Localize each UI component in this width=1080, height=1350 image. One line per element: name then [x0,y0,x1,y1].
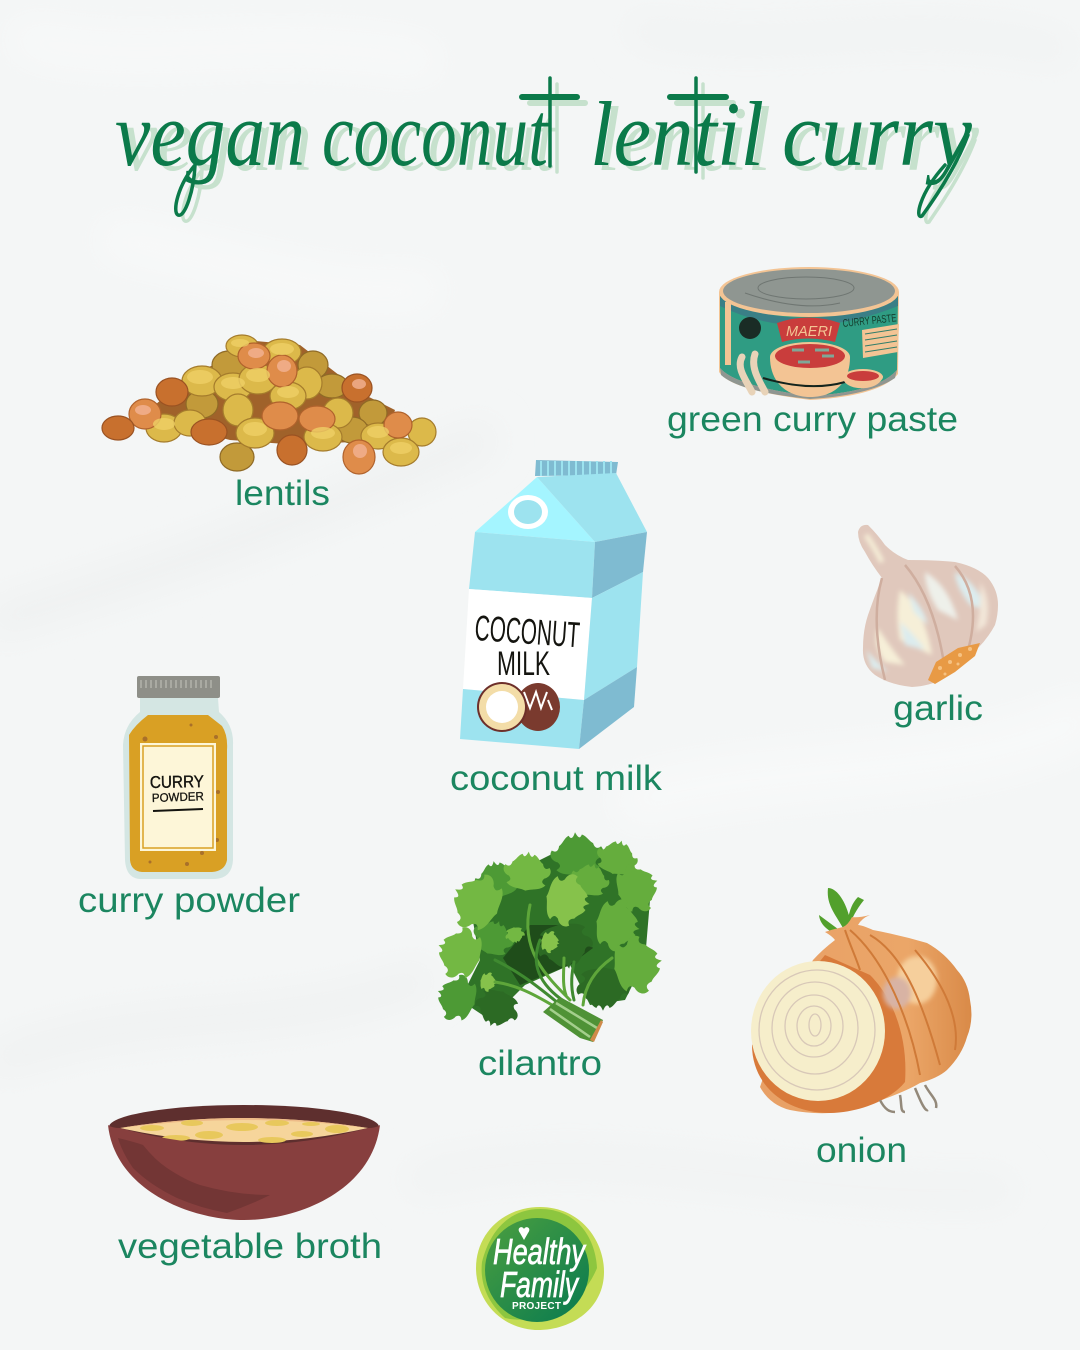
icon: vegetable broth bowl [108,1105,380,1220]
icon: onion [751,888,971,1113]
logo: Healthy Family Project: Healthy [493,1231,587,1272]
icon: lentils pile [102,335,436,474]
icon: green curry paste can: CURRY PASTE [842,312,897,330]
logo: Healthy Family Project: PROJECT [512,1301,561,1312]
icon: green curry paste can [719,267,899,400]
icon: garlic [858,525,998,687]
icon: cilantro bunch [430,830,667,1042]
icon: curry powder jar: CURRY [150,772,204,792]
title: vegan [115,83,305,185]
label: lentils: lentils [235,474,330,513]
icon: coconut milk carton [460,460,647,749]
title: vegan [122,88,312,190]
label: cilantro: cilantro [478,1044,602,1083]
icon: green curry paste can: MAERI [786,323,832,340]
label: green curry paste: green curry paste [667,400,958,439]
icon: coconut milk carton: COCONUT [473,607,581,655]
label: coconut milk: coconut milk [450,759,663,798]
icon: curry powder jar [123,676,233,879]
title: lentil [597,88,771,190]
title: coconut [322,83,550,185]
logo: Healthy Family Project: Family [500,1264,579,1305]
icon: curry powder jar: POWDER [152,789,204,805]
label: garlic: garlic [893,689,983,728]
label: onion: onion [816,1131,907,1170]
label: vegetable broth: vegetable broth [118,1227,382,1266]
title: lentil [590,83,764,185]
title: curry [789,88,979,190]
icon: coconut milk carton: MILK [497,645,550,683]
title [115,78,979,222]
title: curry [782,83,972,185]
title: coconut [329,88,557,190]
label: curry powder: curry powder [78,881,300,920]
logo: Healthy Family Project [476,1207,604,1330]
